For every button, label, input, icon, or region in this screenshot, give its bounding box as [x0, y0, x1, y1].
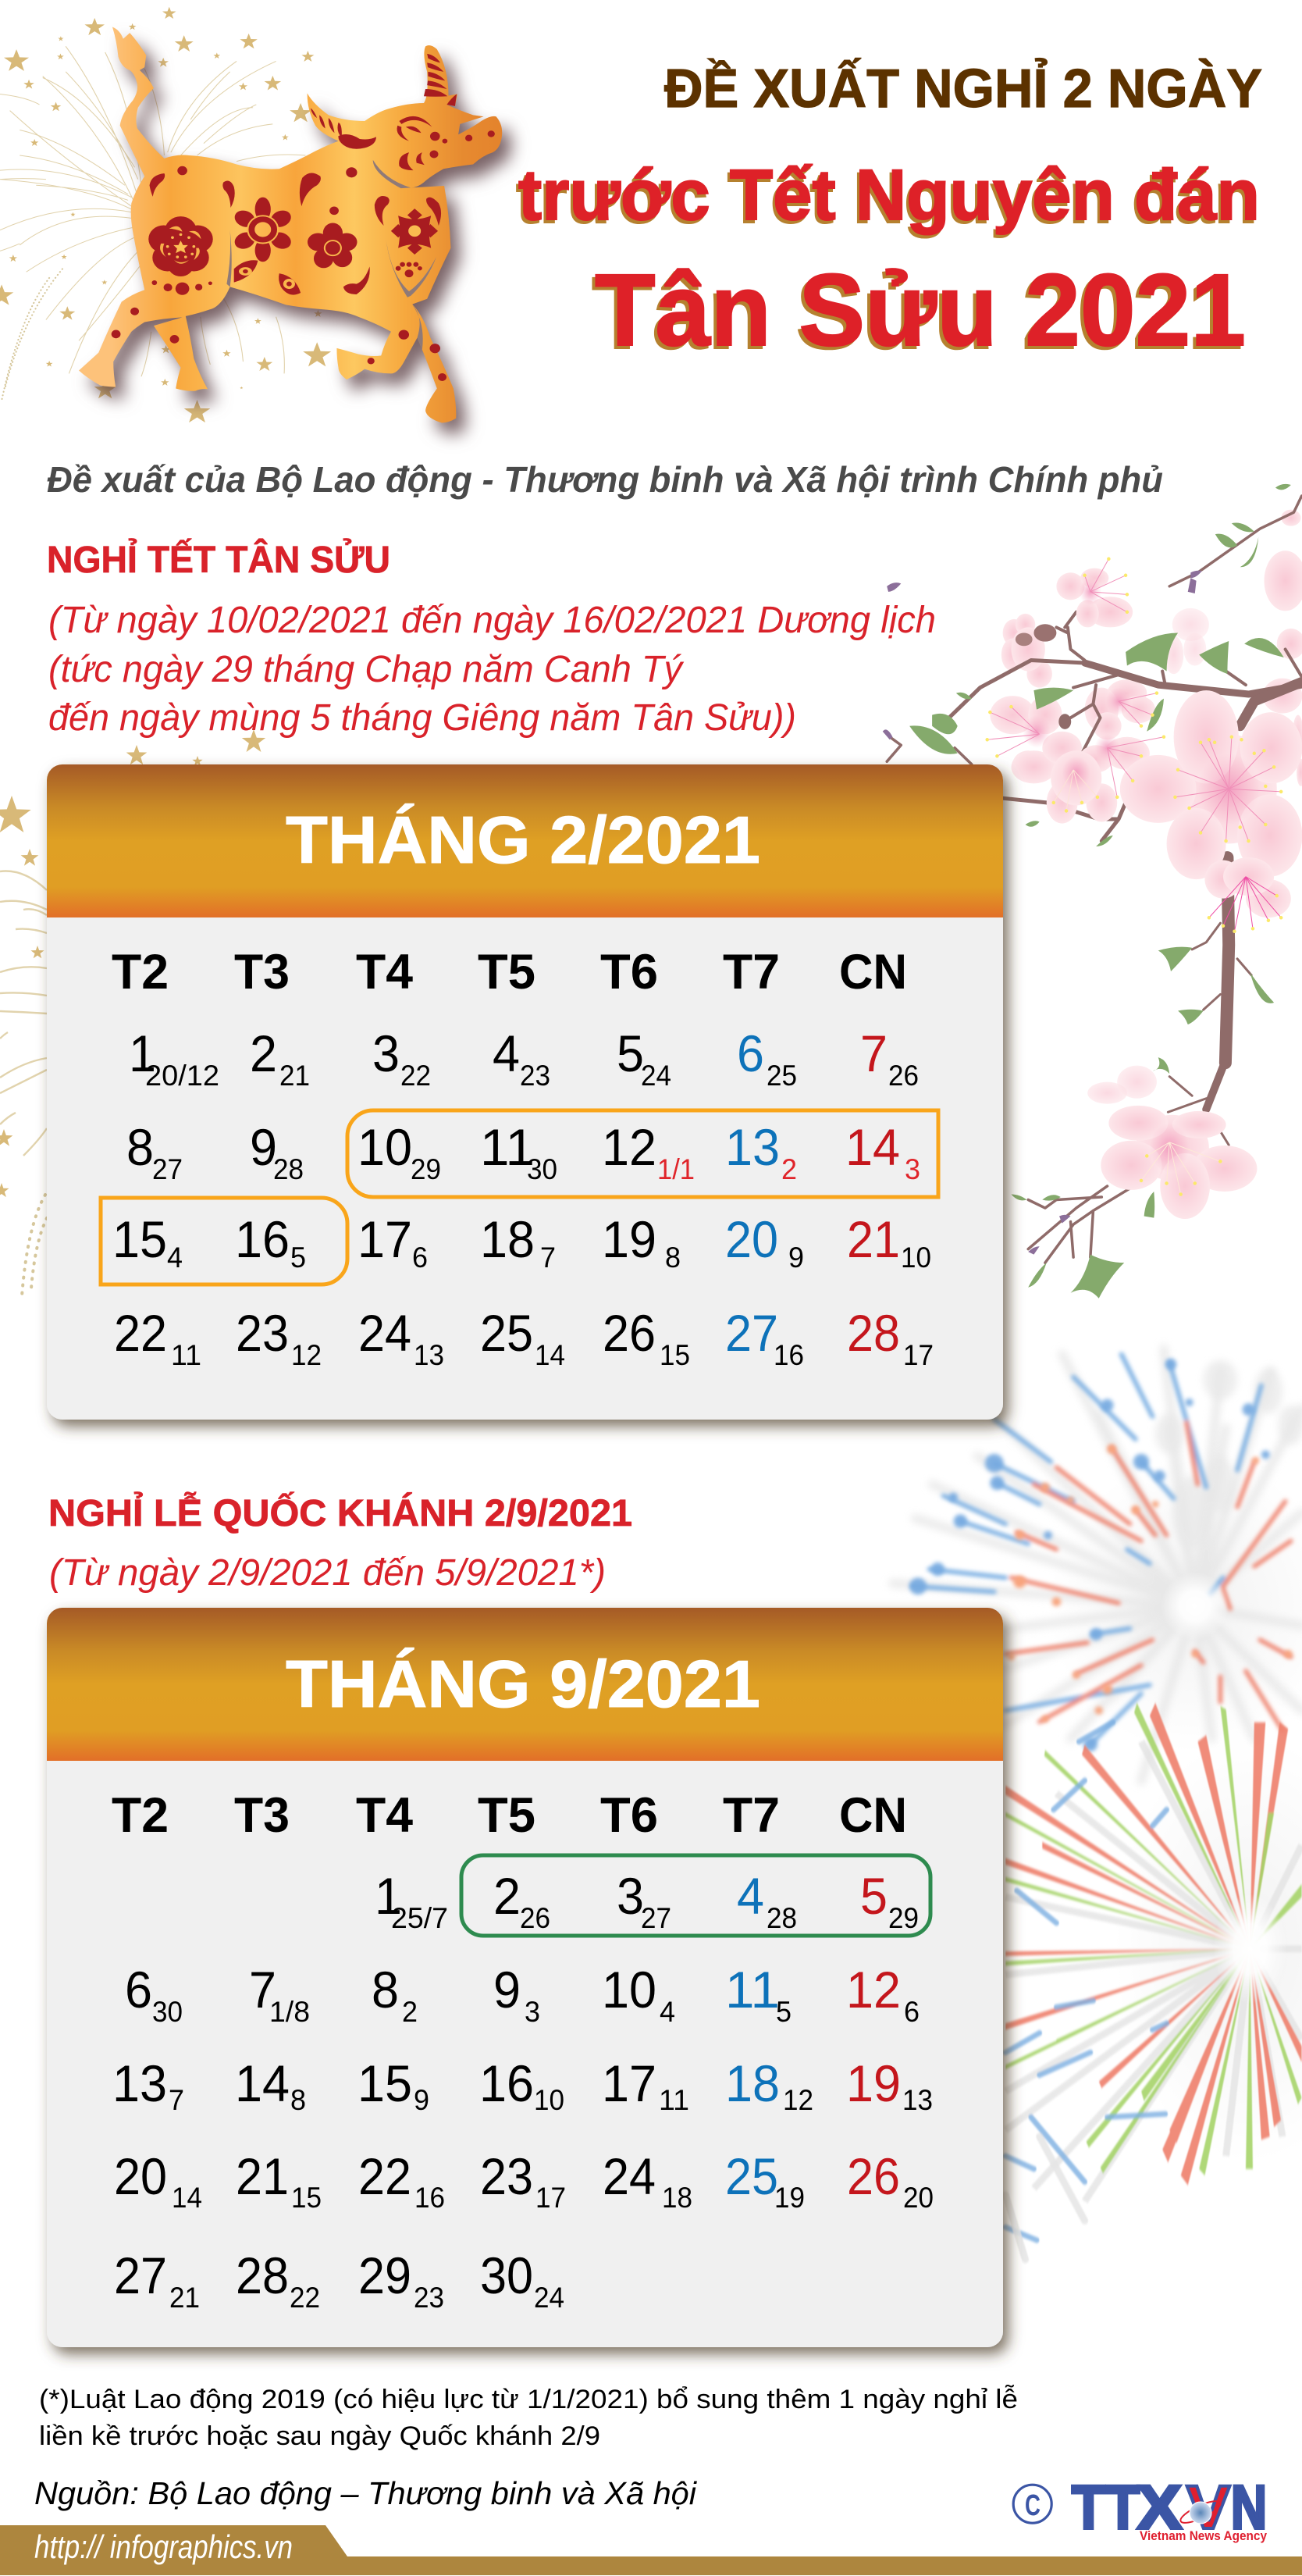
week row 2: 6	[904, 1996, 920, 2028]
calendar header: THÁNG 2/2021	[286, 803, 760, 878]
week row 4: 28	[847, 1304, 900, 1362]
week row 3: 8	[665, 1242, 681, 1274]
week row 5: 30	[480, 2246, 533, 2304]
week row 4	[114, 1304, 934, 1371]
week row 4: 20	[114, 2147, 167, 2205]
weekday labels: T2	[112, 1788, 169, 1843]
week row 3: 12	[783, 2084, 813, 2116]
week row 3: 13	[902, 2084, 933, 2116]
footer band with website	[0, 2525, 1302, 2575]
week row 2: 4	[660, 1996, 675, 2028]
firework burst lower	[1005, 1703, 1302, 2260]
week row 1: 22	[400, 1060, 431, 1092]
week row 5: 22	[290, 2282, 320, 2314]
petals behind the branches	[990, 510, 1302, 1104]
week row 2: 27	[152, 1153, 183, 1185]
week row 4: 15	[291, 2182, 322, 2214]
week row 4	[114, 2147, 934, 2214]
calendar header: THÁNG 9/2021	[286, 1648, 760, 1722]
week row 1: 21	[279, 1060, 310, 1092]
footnote: (*)Luật Lao động 2019 (có hiệu lực từ 1/1/2021) bổ sung thêm 1 ngày nghỉ lễ	[39, 2385, 1018, 2414]
week row 4: 25	[480, 1304, 533, 1362]
week row 4: 12	[291, 1339, 322, 1371]
panel: calendar February 2021	[47, 764, 1003, 1420]
week row 1: 27	[641, 1902, 671, 1934]
title line 3: Tân Sửu 2021	[595, 252, 1246, 367]
week row 1: 2	[250, 1024, 277, 1082]
agency letters: V	[1186, 2472, 1230, 2542]
week row 2: 13	[725, 1118, 780, 1176]
week row 1: 23	[520, 1060, 550, 1092]
week row 4: 22	[358, 2147, 411, 2205]
logo: TTXVN	[1013, 2472, 1267, 2543]
week row 2: 8	[372, 1961, 399, 2018]
week row 2: 11	[725, 1961, 780, 2018]
weekday labels: CN	[839, 945, 907, 999]
week row 3: 16	[479, 2054, 534, 2112]
week row 3: 15	[358, 2054, 412, 2112]
branches	[887, 496, 1302, 1263]
week row 1: 25/7	[391, 1902, 448, 1934]
week row 3: 9	[788, 1242, 804, 1274]
week row 2: 29	[411, 1153, 441, 1185]
week row 2: 2	[781, 1153, 797, 1185]
week row 2: 11	[480, 1118, 535, 1176]
week row 4: 23	[236, 1304, 289, 1362]
week row 2: 30	[527, 1153, 557, 1185]
week row 3: 4	[167, 1242, 183, 1274]
agency name: Vietnam News Agency	[1140, 2528, 1267, 2543]
week row 3: 9	[414, 2084, 429, 2116]
week row 2: 3	[525, 1996, 540, 2028]
foreground petals	[1011, 568, 1302, 1219]
weekday labels: T2	[112, 945, 169, 999]
holiday highlight: 2 to 5	[461, 1855, 930, 1936]
week row 3: 15	[112, 1210, 167, 1268]
agency letters: T	[1106, 2472, 1140, 2542]
week row 5: 27	[114, 2246, 167, 2304]
gold fireworks and stars behind the ox	[0, 7, 331, 422]
purple buds	[883, 571, 1202, 1255]
horn stripes	[311, 54, 447, 137]
flower two	[231, 198, 294, 262]
weekday labels: T3	[234, 1788, 290, 1843]
week row 1: 25	[767, 1060, 797, 1092]
firework burst upper	[892, 1349, 1302, 1781]
week row 1: 7	[860, 1024, 888, 1082]
subtitle: Đề xuất của Bộ Lao động - Thương binh và Xã hội trình Chính phủ	[47, 459, 1163, 500]
gold fireworks and stars at left edge	[0, 729, 265, 1296]
week row 3: 13	[112, 2054, 167, 2112]
week row 4: 26	[847, 2147, 900, 2205]
week row 1: 20/12	[145, 1060, 219, 1092]
week row 4: 19	[774, 2182, 805, 2214]
calendar header	[47, 1608, 1003, 1761]
week row 3: 19	[602, 1210, 656, 1268]
eye and cheek	[397, 94, 457, 170]
week row 4: 13	[414, 1339, 444, 1371]
comma motifs	[150, 134, 441, 294]
week row 4: 20	[903, 2182, 934, 2214]
flower one	[148, 216, 213, 276]
weekday labels: T5	[478, 1788, 535, 1843]
weekday labels: T4	[356, 1788, 413, 1843]
week row 4: 16	[774, 1339, 804, 1371]
week row 3: 6	[412, 1242, 428, 1274]
globe	[1178, 2497, 1223, 2527]
week row 3: 5	[290, 1242, 306, 1274]
week row 2: 5	[776, 1996, 792, 2028]
text block: Tet holiday dates	[48, 600, 936, 739]
week row 1: 29	[888, 1902, 919, 1934]
week row 4: 21	[236, 2147, 289, 2205]
week row 4: 14	[535, 1339, 565, 1371]
week row 2: 1/1	[657, 1153, 695, 1185]
copyright mark: C	[1025, 2489, 1041, 2522]
week row 1	[375, 1867, 919, 1934]
weekday labels: CN	[839, 1788, 907, 1843]
stamens	[987, 559, 1281, 1194]
week row 3: 10	[534, 2084, 564, 2116]
flower centres	[1023, 578, 1260, 1172]
holiday highlight: 10 to 14	[347, 1110, 938, 1197]
week row 4: 17	[535, 2182, 566, 2214]
week row 3: 7	[540, 1242, 556, 1274]
week row 3: 17	[358, 1210, 412, 1268]
week row 3: 18	[480, 1210, 535, 1268]
weekday labels: T4	[356, 945, 413, 999]
week row 4: 15	[660, 1339, 690, 1371]
week row 1: 5	[860, 1867, 888, 1925]
week row 3: 20	[725, 1210, 778, 1268]
week row 2: 12	[602, 1118, 656, 1176]
week row 3	[112, 1210, 931, 1274]
week row 2: 2	[402, 1996, 418, 2028]
week row 3: 19	[846, 2054, 901, 2112]
plum blossom branch	[883, 484, 1302, 1299]
source: Nguồn: Bộ Lao động – Thương binh và Xã hội	[34, 2475, 698, 2511]
week row 5: 28	[236, 2246, 289, 2304]
agency letters: T	[1072, 2472, 1105, 2542]
eye motifs on belly	[234, 260, 301, 295]
week row 1: 3	[372, 1024, 400, 1082]
weekday labels: T3	[234, 945, 290, 999]
week row 5: 24	[534, 2282, 564, 2314]
week row 4: 22	[114, 1304, 167, 1362]
week row 5	[114, 2246, 564, 2314]
agency letters: X	[1137, 2472, 1182, 2542]
footnote: liền kề trước hoặc sau ngày Quốc khánh 2/9	[39, 2421, 600, 2451]
week row 2: 30	[152, 1996, 183, 2028]
week row 2: 8	[126, 1118, 154, 1176]
week row 1: 26	[520, 1902, 550, 1934]
panel: calendar September 2021	[47, 1608, 1003, 2347]
week row 4: 14	[172, 2182, 202, 2214]
week row 2: 10	[602, 1961, 656, 2018]
week row 1: 26	[888, 1060, 919, 1092]
week row 1: 6	[737, 1024, 764, 1082]
week row 4: 24	[603, 2147, 656, 2205]
week row 2: 7	[249, 1961, 276, 2018]
week row 1	[129, 1024, 919, 1092]
week row 3: 10	[901, 1242, 931, 1274]
paper-cut ox	[79, 27, 502, 423]
weekday labels: T6	[600, 1788, 658, 1843]
week row 2	[126, 1118, 920, 1185]
week row 5: 23	[414, 2282, 444, 2314]
footnote	[39, 2385, 1018, 2451]
text block: Tet holiday dates: (tức ngày 29 tháng Chạp năm Canh Tý	[48, 649, 685, 690]
week row 1: 4	[493, 1024, 520, 1082]
heading: National Day holiday: NGHỈ LỄ QUỐC KHÁNH 2/9/2021	[48, 1491, 632, 1534]
week row 3: 7	[169, 2084, 184, 2116]
week row 3: 11	[659, 2084, 689, 2116]
flower three	[308, 223, 358, 268]
week row 3: 16	[235, 1210, 290, 1268]
week row 4: 24	[358, 1304, 411, 1362]
text block: Tet holiday dates: (Từ ngày 10/02/2021 đến ngày 16/02/2021 Dương lịch	[48, 600, 936, 641]
week row 5: 29	[358, 2246, 411, 2304]
week row 4: 16	[414, 2182, 445, 2214]
text block: Tet holiday dates: đến ngày mùng 5 tháng Giêng năm Tân Sửu))	[48, 697, 796, 739]
text block: National Day dates: (Từ ngày 2/9/2021 đến 5/9/2021*)	[49, 1552, 606, 1594]
footer band with website: http:// infographics.vn	[34, 2528, 293, 2565]
week row 1: 5	[617, 1024, 644, 1082]
heading: Tet holiday: NGHỈ TẾT TÂN SỬU	[47, 538, 390, 581]
week row 1: 2	[493, 1867, 521, 1925]
week row 1: 1	[375, 1867, 402, 1925]
week row 3: 17	[602, 2054, 656, 2112]
week row 2: 6	[125, 1961, 152, 2018]
week row 4: 17	[903, 1339, 934, 1371]
week row 4: 27	[725, 1304, 778, 1362]
shading cut lines	[226, 160, 436, 350]
weekday labels: T7	[723, 1788, 780, 1843]
week row 4: 26	[603, 1304, 656, 1362]
week row 1: 28	[767, 1902, 797, 1934]
agency letters: N	[1231, 2472, 1267, 2542]
agency letters	[1072, 2472, 1267, 2542]
week row 4: 23	[480, 2147, 533, 2205]
leaves	[909, 484, 1291, 1299]
week row 4: 18	[662, 2182, 692, 2214]
weekday labels	[112, 945, 907, 999]
week row 2: 28	[273, 1153, 304, 1185]
week row 5: 21	[169, 2282, 200, 2314]
week row 3: 18	[725, 2054, 780, 2112]
weekday labels: T7	[723, 945, 780, 999]
week row 3	[112, 2054, 933, 2116]
weekday labels: T6	[600, 945, 658, 999]
week row 2: 10	[358, 1118, 412, 1176]
weekday labels: T5	[478, 945, 535, 999]
week row 1: 3	[617, 1867, 644, 1925]
title	[518, 58, 1262, 367]
flower four	[391, 208, 438, 277]
calendar header	[47, 764, 1003, 917]
week row 2	[125, 1961, 920, 2028]
week row 1: 24	[641, 1060, 671, 1092]
holiday highlight: 15 to 16	[101, 1198, 347, 1284]
week row 4: 11	[171, 1339, 201, 1371]
week row 2: 14	[845, 1118, 900, 1176]
week row 3: 14	[235, 2054, 290, 2112]
copyright mark	[1013, 2485, 1051, 2523]
title line 1: ĐỀ XUẤT NGHỈ 2 NGÀY	[664, 58, 1262, 119]
week row 2: 12	[846, 1961, 901, 2018]
week row 4: 25	[725, 2147, 778, 2205]
week row 3: 8	[290, 2084, 306, 2116]
week row 1: 1	[129, 1024, 156, 1082]
week row 3: 21	[847, 1210, 900, 1268]
weekday labels	[112, 1788, 907, 1843]
ox ornaments	[112, 54, 495, 381]
title line 2: trước Tết Nguyên đán	[518, 155, 1260, 235]
ox body silhouette	[79, 27, 502, 423]
week row 1: 4	[737, 1867, 764, 1925]
week row 2: 9	[250, 1118, 277, 1176]
week row 2: 3	[905, 1153, 920, 1185]
week row 2: 9	[493, 1961, 521, 2018]
week row 2: 1/8	[269, 1996, 310, 2028]
